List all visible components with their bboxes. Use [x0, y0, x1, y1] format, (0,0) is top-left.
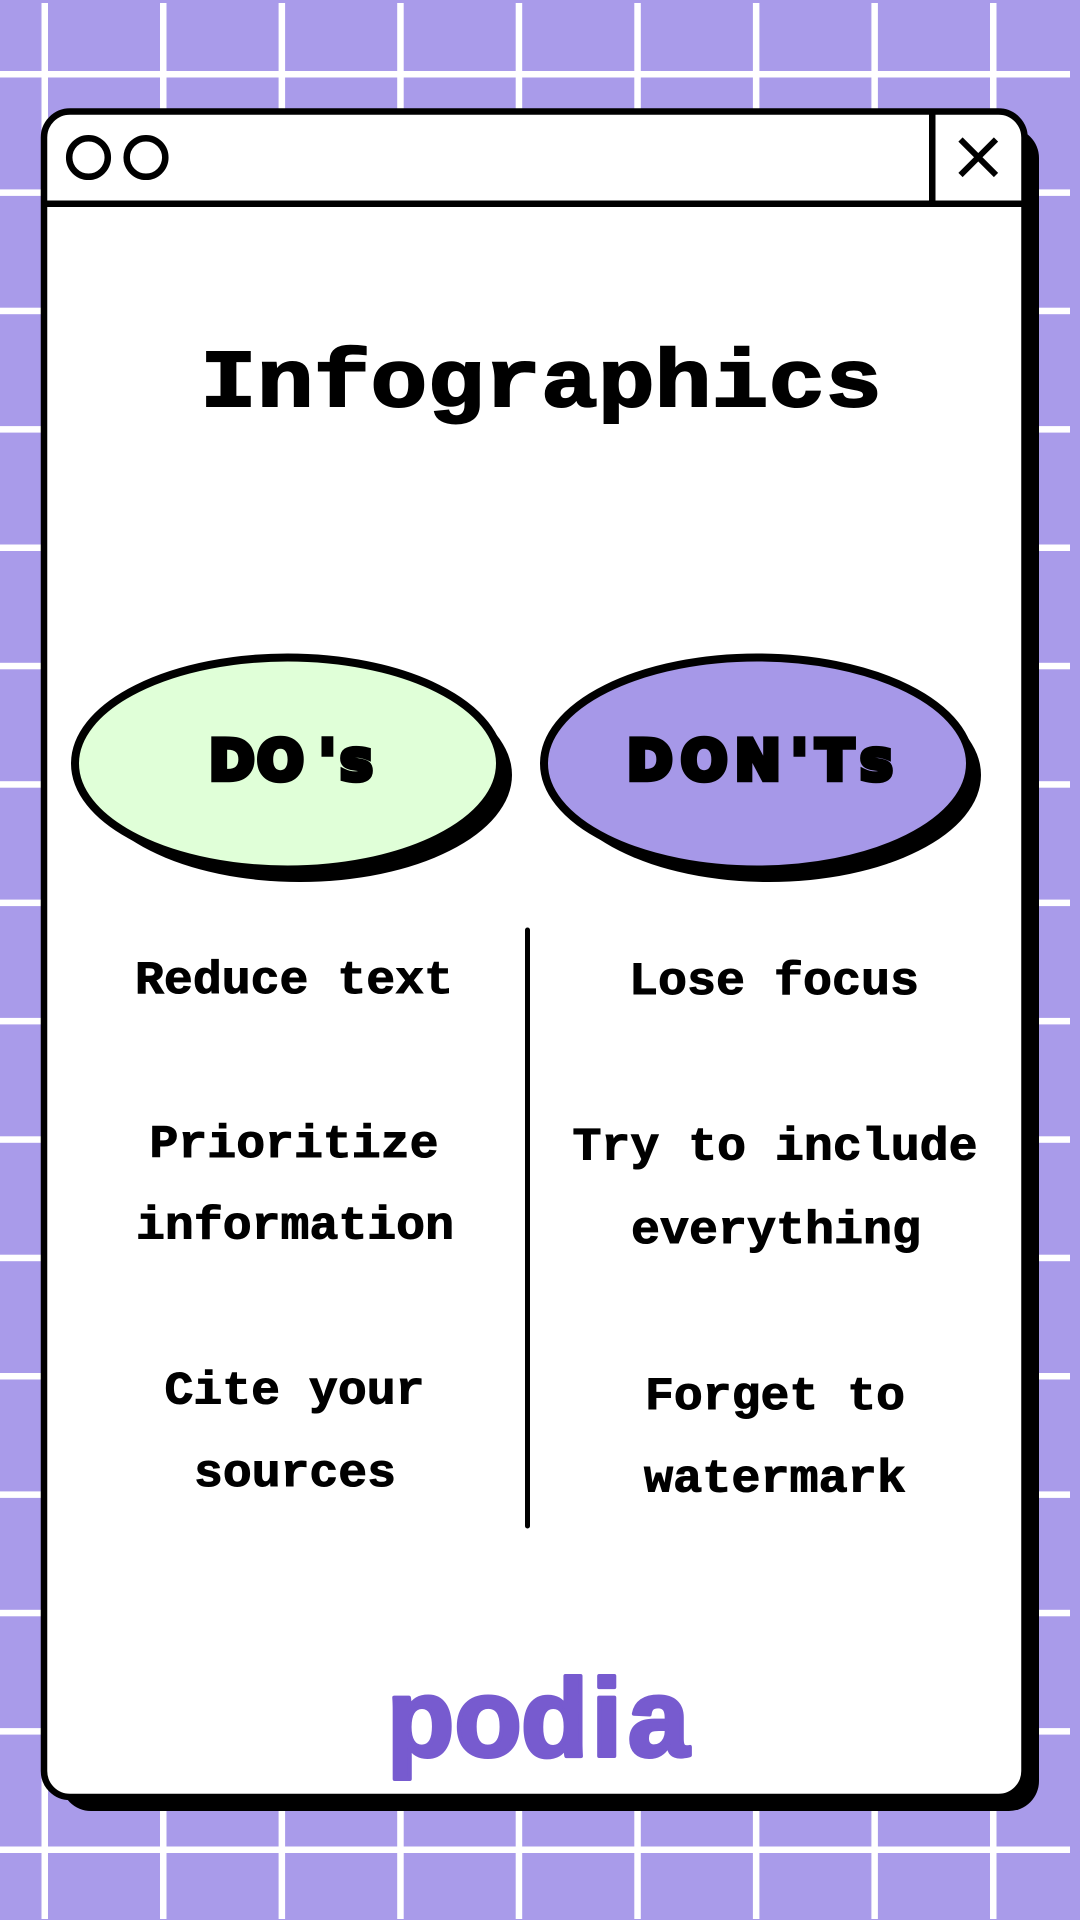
badge label: DO's	[209, 728, 373, 792]
icon: window circles	[69, 138, 165, 177]
item: prioritize information: Prioritize	[150, 1119, 438, 1171]
item: lose focus: Lose focus	[629, 956, 919, 1008]
item: cite your sources: sources	[194, 1448, 396, 1500]
item: cite your sources	[164, 1366, 424, 1500]
do's list	[135, 955, 454, 1500]
item: forget to watermark	[644, 1371, 906, 1506]
column divider	[525, 930, 530, 1526]
item: forget to watermark: Forget to	[645, 1371, 905, 1423]
item: try to include everything: everything	[631, 1205, 921, 1257]
item: try to include everything: Try to include	[572, 1122, 978, 1174]
badge label: DON'Ts	[627, 728, 893, 792]
badge shadow	[557, 668, 981, 882]
item: reduce text: Reduce text	[135, 955, 453, 1007]
badge ellipse	[544, 658, 970, 870]
icon: close X	[960, 140, 996, 175]
don'ts list	[572, 956, 978, 1506]
title bar divider	[44, 200, 1024, 207]
window drop shadow	[61, 128, 1039, 1811]
item: prioritize information	[136, 1119, 454, 1252]
item: forget to watermark: watermark	[644, 1454, 906, 1506]
window frame	[44, 112, 1024, 1797]
item: try to include everything	[572, 1122, 978, 1257]
badge ellipse	[75, 658, 500, 870]
podia logo: podia	[387, 1657, 690, 1780]
DON'Ts badge	[544, 658, 981, 882]
title: Infographics	[200, 338, 882, 431]
DO's badge	[75, 658, 512, 882]
close button divider	[929, 111, 936, 203]
item: cite your sources: Cite your	[164, 1366, 424, 1418]
badge shadow	[88, 668, 512, 882]
item: prioritize information: information	[136, 1200, 454, 1252]
